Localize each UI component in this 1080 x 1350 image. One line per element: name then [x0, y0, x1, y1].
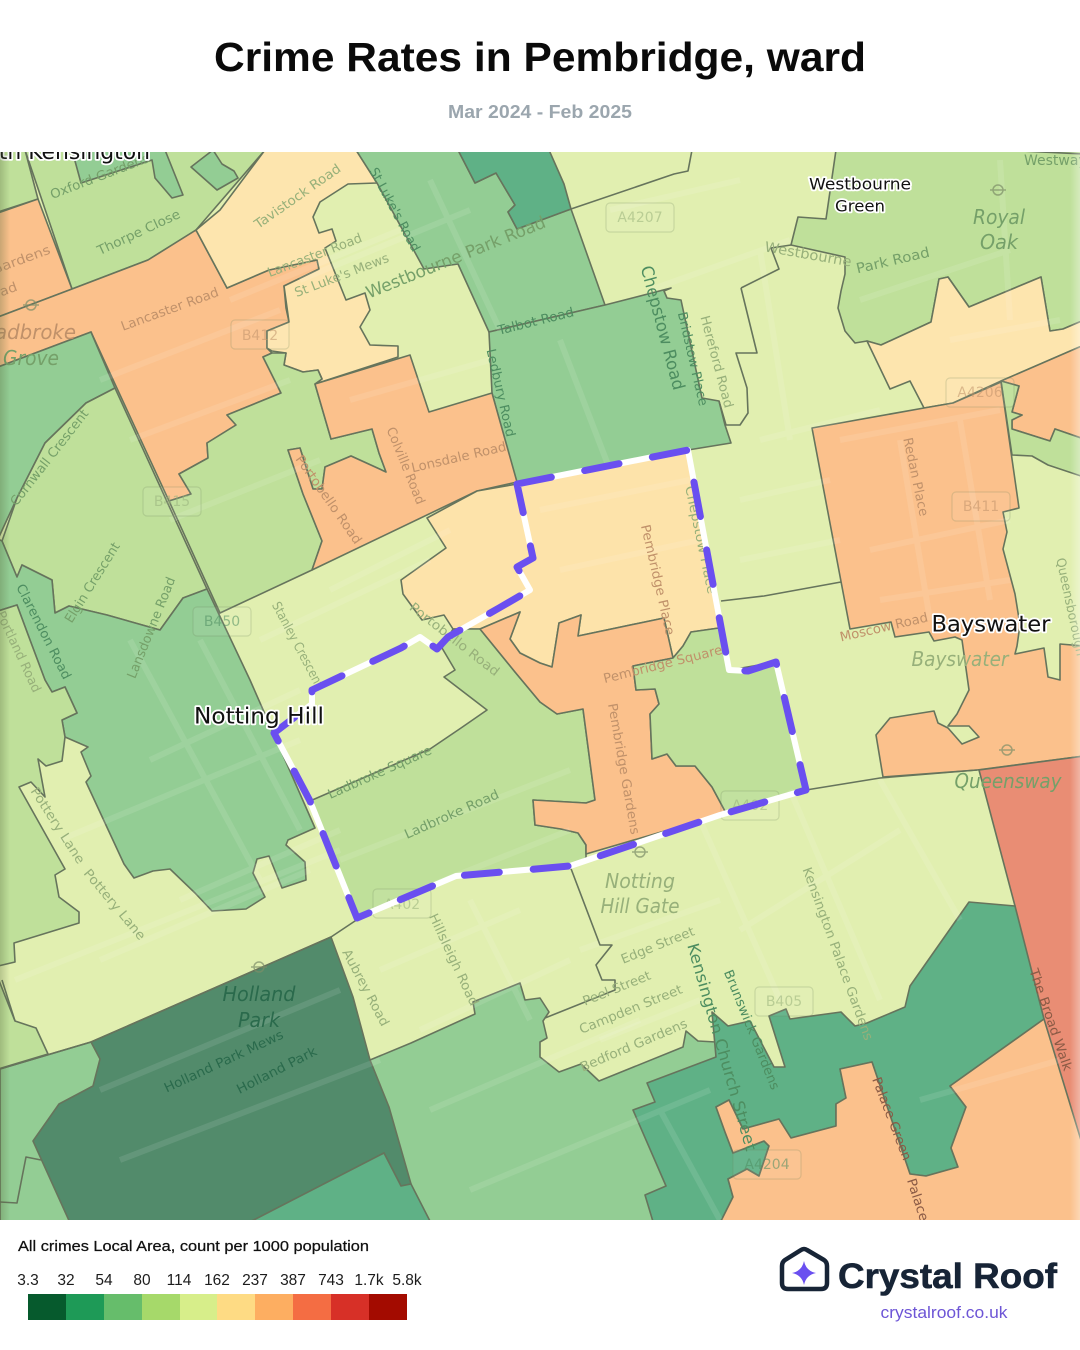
area: Kensington Palace dark green: [633, 902, 1044, 1225]
road shields: A4207: [617, 210, 663, 226]
website: crystalroof.co.uk: [880, 1304, 1008, 1322]
legend scale values: 237: [242, 1272, 268, 1289]
road shields: A402: [732, 798, 768, 814]
street labels: Chepstow Place: [681, 485, 719, 595]
street labels: Elgin Crescent: [62, 540, 124, 626]
area labels in italics: Notting: [605, 869, 675, 893]
legend scale values: 1.7k: [354, 1272, 384, 1289]
area labels in italics: Oak: [980, 230, 1019, 254]
area: Redan Place orange: [812, 382, 1080, 777]
street labels: Tavistock Road: [251, 162, 344, 233]
area: central west light green: [169, 353, 386, 613]
legend scale values: [17, 1272, 422, 1289]
area: Royal Oak light green: [791, 150, 1080, 345]
street labels: Palace Green: [868, 1075, 914, 1163]
area: Portland Road west: [0, 605, 79, 966]
area labels in italics: Bayswater: [912, 647, 1010, 671]
street labels: Stanley Crescent: [268, 600, 326, 690]
area: north-west corner: [0, 150, 38, 212]
road shields: A4204: [744, 1157, 790, 1173]
street labels: Lonsdale Road: [410, 440, 508, 476]
road shields: B412: [242, 328, 278, 344]
street labels: Lancaster Road: [266, 231, 364, 281]
street labels: Bridstow Place: [674, 311, 710, 407]
street labels: Campden Street: [577, 982, 685, 1038]
area labels in italics: Park: [238, 1008, 281, 1032]
area: Ladbroke light green: [310, 629, 595, 918]
title: Crime Rates in Pembridge, ward: [214, 34, 866, 80]
area: Royal Oak south pale: [867, 277, 1080, 408]
road shields: A4206: [957, 385, 1003, 401]
street labels: Lancaster Road: [119, 285, 221, 335]
subtitle: date range: Mar 2024 - Feb 2025: [448, 101, 632, 122]
place names with halo: Westbourne: [809, 174, 911, 194]
street labels: Hereford Road: [696, 314, 736, 410]
road shields: B405: [766, 994, 802, 1010]
street labels: Clarendon Road: [12, 582, 74, 682]
icon: house with star: [782, 1249, 827, 1289]
legend colour ramp: [28, 1294, 407, 1320]
map edge fade: [0, 152, 1080, 1220]
area: Oxford Gardens: [25, 150, 265, 289]
area: Lancaster Road orange: [0, 230, 319, 501]
street labels: Westbourne Park Road: [363, 213, 549, 303]
area: Lansdowne mid-green: [0, 539, 315, 911]
road shields: A402: [384, 897, 420, 913]
logo wordmark: Crystal Roof: [838, 1257, 1057, 1296]
ward boundary: dashed purple on white: [274, 450, 806, 918]
area labels in italics: Holland: [222, 982, 296, 1006]
place names with halo: Bayswater: [932, 612, 1051, 638]
street labels: Oxford Gardens: [48, 151, 152, 203]
area: patch north: [72, 150, 183, 198]
area: orange west corner: [0, 199, 72, 317]
street labels: Chepstow Road: [636, 264, 688, 392]
area: Palace orange: [716, 1019, 1080, 1225]
street labels: Pembridge Square: [602, 643, 724, 687]
street labels: The Broad Walk: [1025, 966, 1075, 1073]
street labels: Talbot Road: [495, 305, 576, 339]
street labels: Moscow Road: [838, 611, 930, 645]
place names with halo: [0, 140, 1051, 730]
area: south-west sliver: [0, 978, 48, 1069]
street labels: St Luke's Mews: [293, 251, 392, 301]
area: Pembridge Square light green: [633, 628, 806, 813]
area: Chepstow mid-green: [489, 288, 731, 484]
area: south dark green patch: [256, 1154, 430, 1220]
area: Pembridge Gardens orange: [480, 612, 726, 854]
area labels in italics: Grove: [3, 346, 59, 370]
area: east light green: [1001, 381, 1080, 477]
legend scale values: 162: [204, 1272, 230, 1289]
area: patch north 2: [191, 150, 238, 190]
street labels: Park Road: [855, 245, 931, 277]
road shields: B450: [204, 614, 240, 630]
road shields: B411: [963, 499, 999, 515]
station markers: [23, 185, 1015, 972]
area: south mid-green: [0, 983, 716, 1230]
area: Pembridge ward pale: [401, 450, 719, 667]
street labels: Ladbroke Road: [402, 787, 502, 843]
legend scale values: 387: [280, 1272, 306, 1289]
legend title: All crimes Local Area, count per 1000 population: [18, 1239, 369, 1255]
legend scale values: 32: [57, 1272, 75, 1289]
street labels: Palace: [903, 1177, 931, 1223]
street labels: Hillsleigh Road: [425, 912, 481, 1008]
place names with halo: Notting Hill: [194, 704, 324, 730]
area labels in italics: Queensway: [954, 769, 1063, 793]
street labels: Kensington Palace Gardens: [799, 865, 875, 1043]
street labels: Kensington Church Street: [683, 941, 761, 1153]
legend scale values: 3.3: [17, 1272, 39, 1289]
street labels: Holland Park Mews: [162, 1028, 286, 1096]
logo: Crystal Roof: [782, 1249, 1057, 1322]
legend scale values: 114: [167, 1272, 192, 1289]
area: dark green north: [458, 150, 571, 229]
legend scale values: 5.8k: [392, 1272, 422, 1289]
street labels: Cornwall Crescent: [8, 407, 92, 509]
road shields: [143, 203, 1014, 1179]
area: west mid-green: [0, 332, 115, 539]
area labels in italics: Hill Gate: [600, 894, 680, 918]
street labels: Redan Place: [899, 436, 931, 518]
street labels: Brunswick Gardens: [720, 968, 782, 1092]
area: Colville orange: [288, 355, 517, 570]
street labels: Aubrey Road: [338, 947, 392, 1029]
street labels: Westbourne: [763, 239, 853, 271]
area labels in italics: [0, 205, 1063, 1032]
street labels: Pembridge Place: [637, 523, 677, 637]
area: Broad Walk red: [979, 756, 1080, 1150]
area: Westbourne Park mid-green: [356, 150, 605, 332]
street labels: Pembridge Gardens: [604, 702, 642, 836]
legend: [17, 1239, 422, 1320]
street labels: Portobello Road: [292, 453, 364, 547]
legend scale values: 54: [95, 1272, 113, 1289]
street labels: Lansdowne Road: [125, 575, 179, 681]
area: Elgin crescent: [2, 388, 207, 630]
road shields: B415: [154, 494, 190, 510]
street labels: Colville Road: [383, 425, 427, 507]
street labels: Pottery Lane: [80, 866, 148, 944]
street labels: Thorpe Close: [94, 207, 183, 259]
street labels: [0, 151, 1080, 1223]
street labels: Bedford Gardens: [578, 1017, 690, 1075]
street labels: St Luke's Road: [366, 165, 422, 255]
legend scale values: 80: [133, 1272, 151, 1289]
street labels: Peel Street: [581, 969, 653, 1009]
street labels: Portobello Road: [406, 600, 502, 680]
street labels: Edge Street: [619, 924, 697, 968]
legend scale values: 743: [318, 1272, 344, 1289]
street labels: Pottery Lane: [27, 785, 87, 867]
area: Holland Park darkest: [33, 937, 411, 1225]
street labels: Holland Park: [234, 1044, 320, 1098]
area: Tavistock pale: [196, 150, 398, 384]
area labels in italics: Royal: [973, 205, 1025, 229]
place names with halo: Green: [835, 196, 885, 216]
street labels: Ladbroke Square: [326, 743, 434, 803]
area: east orange: [1001, 345, 1080, 441]
street labels: Ledbury Road: [483, 347, 517, 439]
